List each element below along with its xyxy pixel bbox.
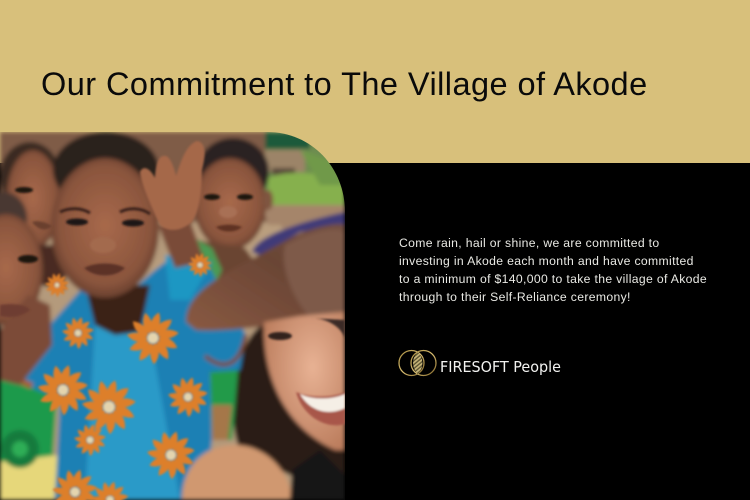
- body text: investing in Akode each month and have committed: [399, 254, 694, 268]
- background child left: [0, 140, 58, 194]
- front child arm: [0, 295, 52, 385]
- logo wordmark: FIRESOFT People: [440, 358, 561, 376]
- background child right: [200, 136, 272, 189]
- woman's skin: [264, 312, 345, 450]
- blue dress: [12, 252, 246, 500]
- green wrap: [0, 378, 59, 464]
- logo mark: [399, 350, 436, 376]
- logo: FIRESOFT People: [398, 350, 561, 376]
- header band: [0, 0, 750, 163]
- body text: Come rain, hail or shine, we are committed to: [399, 236, 660, 250]
- hand: [140, 141, 205, 230]
- raised forearm of main child: [158, 220, 205, 268]
- front left child: [0, 190, 29, 224]
- body text: through to their Self-Reliance ceremony!: [399, 290, 631, 304]
- title: Our Commitment to The Village of Akode: [41, 66, 648, 102]
- sunglasses strap: [252, 212, 345, 256]
- woman's hair: [230, 324, 345, 478]
- body text: [399, 236, 707, 304]
- body text: to a minimum of $140,000 to take the village of Akode: [399, 272, 707, 286]
- dress flowers: [127, 312, 179, 364]
- photo: children of Akode with a smiling woman: [0, 132, 345, 500]
- main child neck and head: [85, 285, 150, 335]
- background wall and ground: [0, 218, 296, 500]
- faces: eyes, nose and mouths: [66, 218, 88, 226]
- outstretched arm: [186, 224, 345, 330]
- woman's face: eye, smile and teeth: [268, 332, 292, 340]
